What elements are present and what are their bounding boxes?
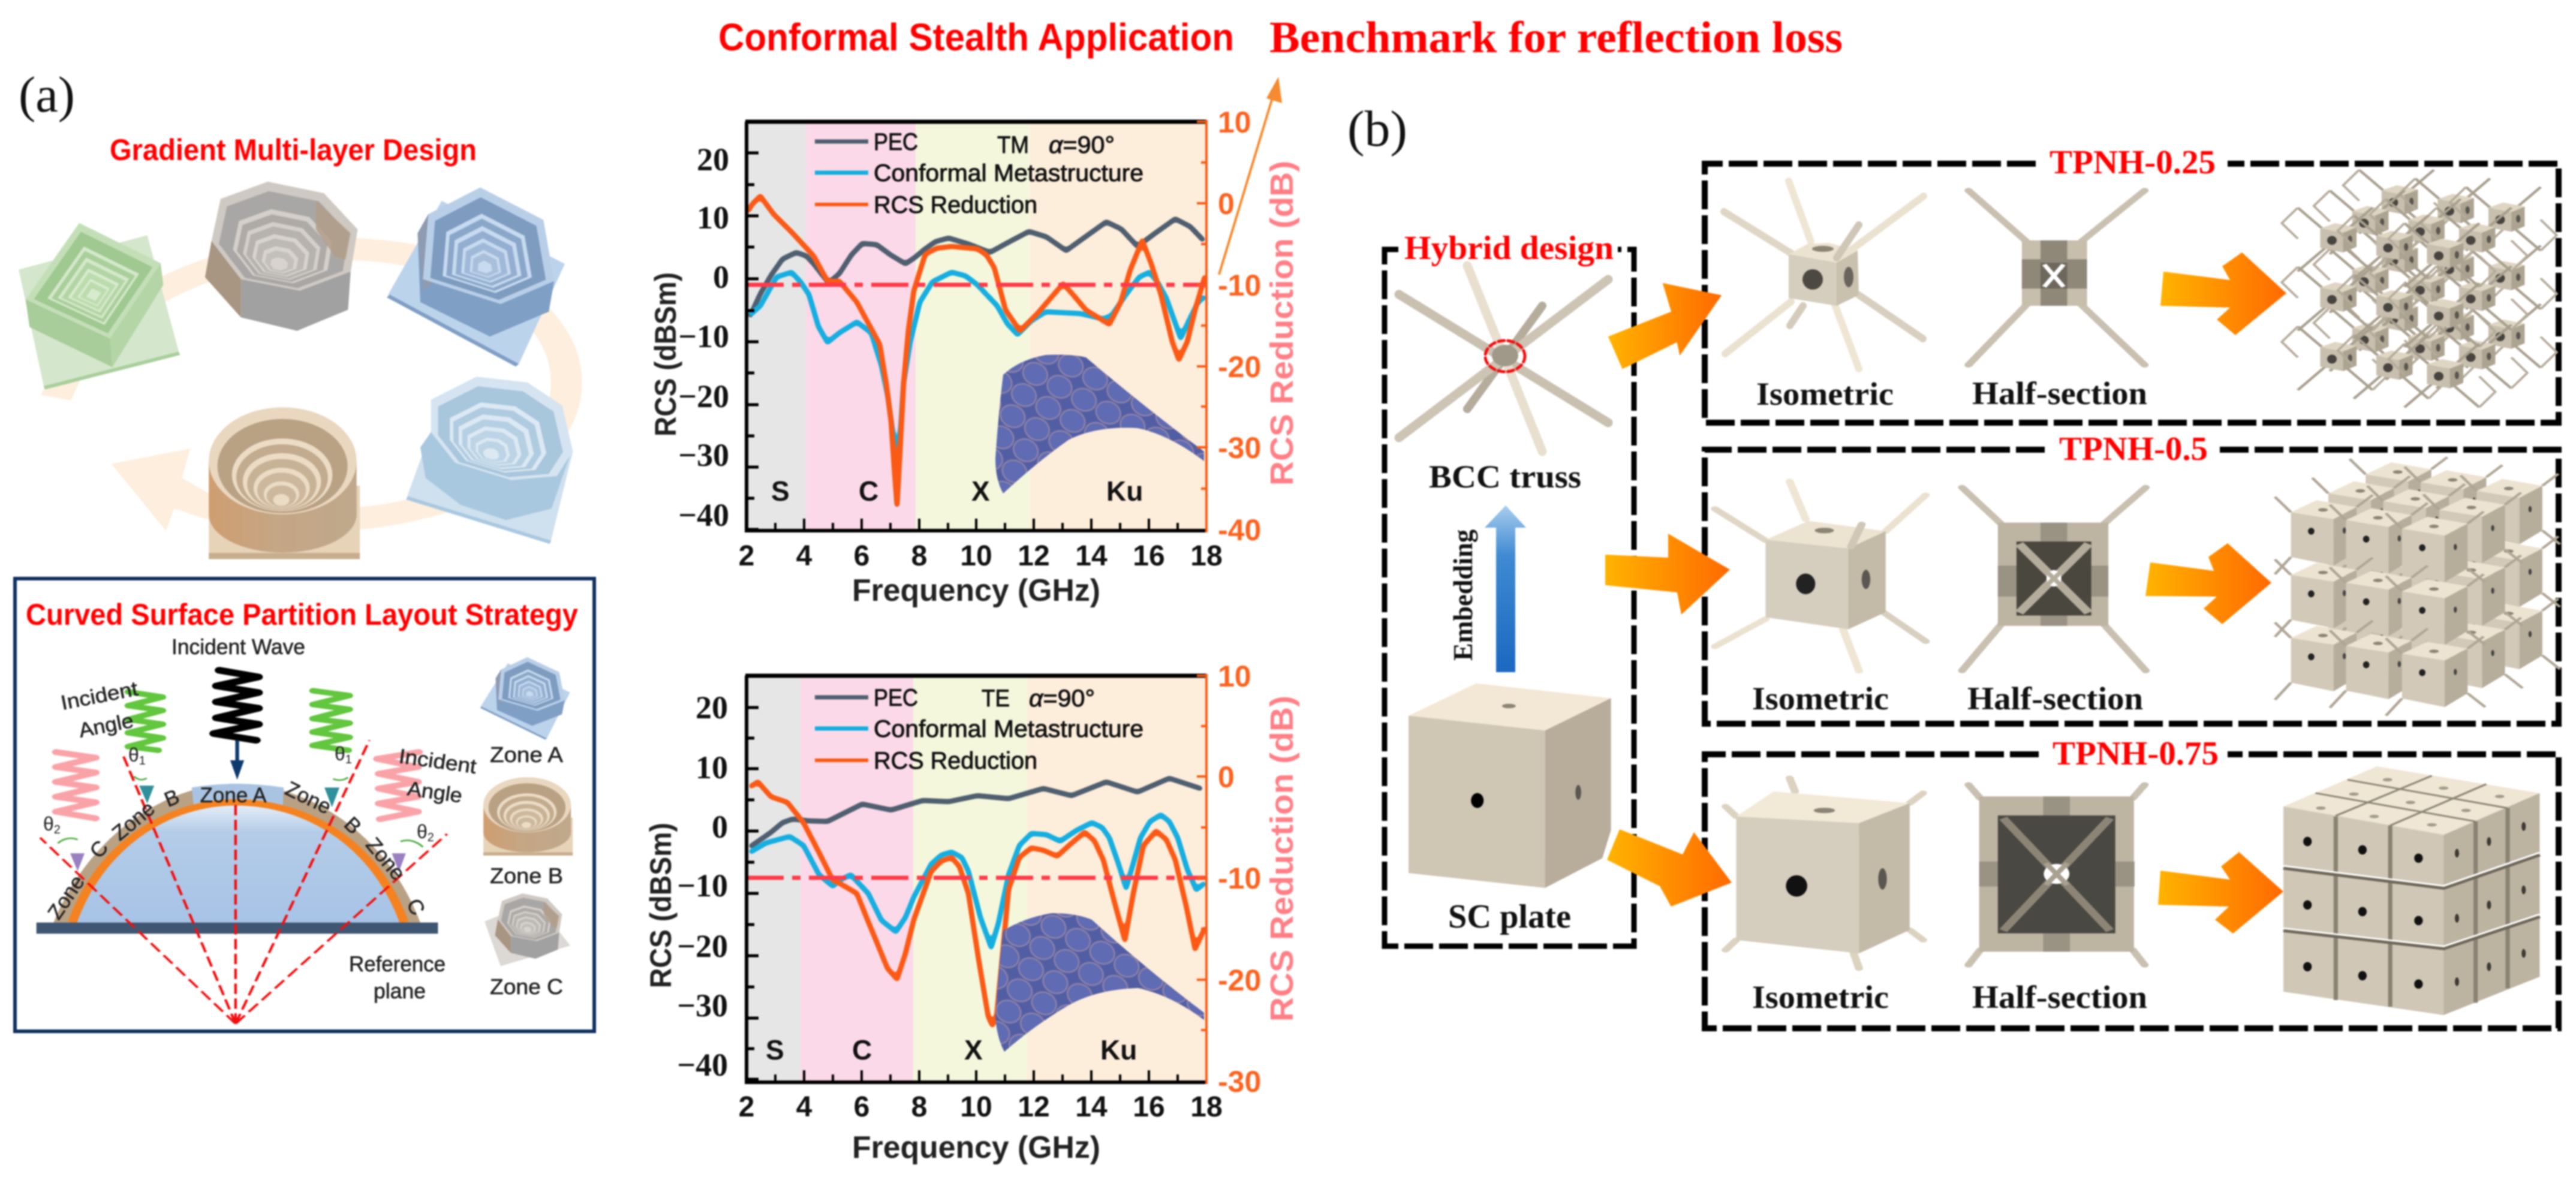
panel: TPNH-0.75 (1705, 735, 2559, 1028)
curve: RCS reduction (747, 196, 1205, 505)
right axis tick labels: -10 (1218, 862, 1261, 895)
legend: PEC (874, 129, 918, 155)
label: Reference plane: plane (374, 979, 426, 1003)
labels: theta angles: θ (335, 743, 345, 764)
dome orange surface (73, 802, 404, 923)
zone labels along dome: Zone (43, 871, 89, 924)
label: Incident Wave: Incident Wave (171, 634, 305, 659)
axes (745, 120, 1206, 532)
frequency bands (747, 122, 1206, 531)
diagram: gradient multi-layer design cycle (19, 182, 573, 559)
x axis tick labels: 16 (1133, 1091, 1165, 1123)
wave: green left (128, 692, 162, 803)
icon: TPNH-0.5 lattice (2275, 457, 2560, 716)
legend: α=90° (1029, 685, 1095, 712)
label: Isometric: Isometric (1752, 979, 1889, 1015)
label: Isometric: Isometric (1752, 681, 1889, 717)
curve: conformal metastructure (750, 815, 1205, 947)
heading: Curved Surface Partition Layout Strategy: Curved Surface Partition Layout Strategy (26, 598, 578, 631)
curve: PEC (750, 778, 1202, 847)
x axis tick labels: 8 (911, 540, 927, 572)
x axis tick labels (739, 540, 1223, 572)
inset: conformal metastructure (995, 355, 1204, 493)
left axis tick labels (678, 142, 729, 533)
labels: theta angles: 2 (428, 831, 434, 844)
left axis tick labels: −40 (677, 1047, 728, 1083)
legend: PEC (874, 685, 918, 711)
legend: RCS Reduction (874, 748, 1037, 774)
x axis tick labels (739, 1091, 1223, 1123)
icon: half-section unit (1962, 487, 2145, 670)
label: Incident Angle left: Angle (77, 709, 136, 742)
left axis tick labels: 0 (712, 809, 728, 845)
left axis tick labels: −30 (677, 988, 728, 1024)
x axis tick labels: 16 (1133, 540, 1165, 572)
icon: Zone A hexagon (481, 657, 570, 739)
threshold line (747, 283, 1206, 287)
right axis tick labels: 10 (1218, 106, 1251, 139)
labels: theta angles: θ (128, 744, 139, 766)
dome body (73, 802, 404, 923)
x axis tick labels: 18 (1190, 540, 1223, 572)
band labels (771, 475, 1143, 507)
right axis tick labels: 0 (1218, 760, 1235, 794)
legend (815, 129, 1143, 218)
icon: gray octagon cell (205, 182, 357, 331)
diagram: curved dome with zones (37, 670, 447, 1024)
zone labels along dome: C (402, 895, 429, 919)
x axis tick labels: 6 (854, 1091, 869, 1123)
x axis tick labels: 2 (739, 540, 754, 572)
axis title: Frequency (GHz): Frequency (GHz) (852, 1130, 1100, 1165)
label: Half-section: Half-section (1972, 979, 2147, 1015)
label: Half-section: Half-section (1972, 375, 2147, 411)
legend: TE (982, 685, 1010, 712)
band labels (766, 1034, 1137, 1065)
arrow: hybrid to TPNH-0.5 (1605, 534, 1730, 615)
left axis tick labels: 10 (696, 749, 728, 785)
left axis tick labels (677, 690, 728, 1083)
icon: half-section unit (1969, 785, 2145, 965)
icon: Zone B circle (483, 777, 573, 856)
zone labels along dome: Zone (108, 797, 160, 845)
icon: BCC truss (1399, 266, 1608, 451)
dome outer zone band (53, 784, 420, 923)
zone A band (192, 784, 284, 808)
label: Incident Angle left (59, 678, 140, 742)
arrow: to lattice (2160, 252, 2286, 335)
panel: TPNH-0.5 (1705, 431, 2560, 724)
heading: Conformal Stealth Application: Conformal Stealth Application (718, 16, 1234, 59)
labels: theta angles (43, 743, 434, 844)
right axis tick labels: -40 (1218, 513, 1261, 547)
arrow: SC plate to TPNH-0.75 (1607, 829, 1732, 907)
band labels: C (859, 475, 878, 507)
x axis tick labels: 18 (1190, 1091, 1223, 1123)
left axis tick labels: −20 (677, 928, 728, 964)
heading: Hybrid design: Hybrid design (1404, 230, 1614, 267)
label: Reference plane: Reference (349, 952, 446, 976)
icon: green square cell (19, 223, 179, 389)
arrow: orange axis extension (1219, 77, 1282, 275)
arrow: to lattice (2145, 543, 2271, 624)
x axis tick labels: 4 (796, 540, 812, 572)
threshold line (747, 875, 1206, 880)
wave: black normal incidence (214, 670, 258, 779)
legend: zone icons (481, 657, 573, 999)
axes (745, 674, 1206, 1084)
wave: pink left (56, 752, 95, 871)
x axis tick labels: 12 (1018, 540, 1050, 572)
label: Embedding: Embedding (1448, 529, 1478, 661)
arrow: embedding (1485, 505, 1526, 672)
inset: conformal metastructure (995, 913, 1204, 1052)
label: Half-section: Half-section (1967, 681, 2143, 717)
right axis tick labels: 0 (1218, 187, 1235, 221)
legend: RCS Reduction (874, 192, 1037, 218)
legend: α=90° (1049, 132, 1115, 158)
zone labels along dome: C (85, 836, 113, 863)
x axis tick labels: 12 (1018, 1091, 1050, 1123)
zone labels along dome: Zone (282, 777, 335, 819)
icon: light blue decagon cell (407, 377, 573, 543)
left axis tick labels: −30 (678, 437, 729, 473)
icon: isometric unit (1726, 778, 1923, 968)
right axis tick labels (1218, 106, 1261, 547)
label: Incident Angle right: Incident (398, 745, 478, 778)
axis title: RCS Reduction (dB): RCS Reduction (dB) (1264, 161, 1300, 486)
highlight circle (1485, 341, 1525, 372)
x axis tick labels: 14 (1075, 1091, 1108, 1123)
heading: Gradient Multi-layer Design: Gradient Multi-layer Design (110, 133, 477, 167)
labels: theta angles: 2 (54, 823, 61, 836)
band labels: Ku (1100, 1034, 1137, 1065)
label: Incident Angle right: Angle (406, 777, 464, 808)
panel: curved surface partition layout strategy (15, 579, 594, 1031)
labels: theta angles: θ (417, 821, 428, 842)
icon: half-section unit (1969, 191, 2145, 365)
icon: TPNH-0.25 lattice (2282, 170, 2557, 407)
right axis tick labels: -30 (1218, 431, 1261, 465)
partition dashed lines (40, 740, 447, 1024)
x axis tick labels: 4 (796, 1091, 812, 1123)
zone labels along dome: Zone A (200, 784, 267, 807)
left axis tick labels: 0 (713, 259, 729, 295)
label: Incident Angle right (398, 745, 478, 808)
label: panel a: (a) (19, 67, 75, 123)
label: Zone A: Zone A (490, 742, 563, 767)
icon: tan circular cell (209, 407, 360, 559)
icon: isometric unit (1715, 481, 1926, 671)
chart: TM RCS vs frequency (649, 106, 1300, 608)
left axis tick labels: 20 (696, 690, 728, 726)
x axis tick labels: 14 (1075, 540, 1108, 572)
heading: TPNH-0.75: TPNH-0.75 (2053, 735, 2219, 772)
x axis tick labels: 2 (739, 1091, 754, 1123)
left axis tick labels: −20 (678, 378, 729, 414)
label: Zone B: Zone B (490, 863, 563, 888)
incidence angle arcs (58, 776, 423, 847)
labels: theta angles: 1 (345, 753, 352, 766)
x axis tick labels: 10 (960, 540, 992, 572)
left axis tick labels: −10 (677, 868, 728, 904)
panel: TPNH-0.25 (1705, 144, 2559, 423)
zone labels along dome: Zone (361, 833, 410, 885)
right axis tick labels: 10 (1218, 660, 1251, 693)
curve: PEC (750, 219, 1204, 317)
right axis tick labels: -20 (1218, 964, 1261, 997)
right axis tick labels: -10 (1218, 269, 1261, 302)
heading: TPNH-0.5: TPNH-0.5 (2059, 431, 2208, 468)
right axis tick labels (1218, 660, 1261, 1098)
x axis tick labels: 6 (854, 540, 869, 572)
band labels: X (964, 1034, 983, 1065)
icon: isometric unit (1724, 181, 1924, 369)
wave: pink right (377, 752, 419, 872)
labels: theta angles: 1 (139, 754, 146, 767)
right axis tick labels: -30 (1218, 1065, 1261, 1098)
labels: theta angles: θ (43, 813, 54, 835)
x axis tick labels: 10 (960, 1091, 992, 1123)
arrow: pale cycle arc (56, 249, 567, 531)
left axis tick labels: 20 (697, 142, 729, 177)
heading: TPNH-0.25: TPNH-0.25 (2050, 144, 2216, 181)
curve: conformal metastructure (750, 272, 1205, 505)
left axis tick labels: 10 (697, 200, 729, 236)
axis title: Frequency (GHz): Frequency (GHz) (852, 573, 1100, 608)
label: panel b: (b) (1347, 101, 1407, 157)
band labels: S (766, 1034, 784, 1065)
reference plane (37, 923, 438, 934)
icon: SC plate cube (1409, 684, 1611, 888)
icon: TPNH-0.75 lattice (2283, 766, 2539, 1015)
wave: green right (313, 691, 349, 807)
axis title: RCS (dBSm): RCS (dBSm) (649, 272, 682, 437)
label: BCC truss: BCC truss (1429, 459, 1581, 495)
arrow: BCC truss to TPNH-0.25 (1608, 283, 1722, 369)
left axis tick labels: −10 (678, 318, 729, 354)
band labels: X (971, 475, 990, 507)
legend (815, 685, 1143, 774)
label: Incident Angle left: Incident (59, 678, 140, 715)
panel: hybrid design (1385, 230, 1634, 946)
left axis tick labels: −40 (678, 497, 729, 533)
band labels: C (852, 1034, 872, 1065)
legend: Conformal Metastructure (874, 160, 1143, 186)
icon: Zone C octagon (484, 893, 570, 966)
band labels: Ku (1106, 475, 1143, 507)
axis title: RCS (dBSm): RCS (dBSm) (644, 823, 678, 988)
right axis tick labels: -20 (1218, 350, 1261, 384)
heading: Benchmark for reflection loss: Benchmark for reflection loss (1269, 13, 1843, 62)
frequency bands (747, 676, 1206, 1082)
zone labels along dome (43, 777, 429, 924)
label: Reference plane (349, 952, 446, 1003)
label: Isometric: Isometric (1756, 376, 1894, 412)
chart: TE RCS vs frequency (644, 660, 1300, 1165)
curve: RCS reduction (750, 782, 1205, 1025)
x axis tick labels: 8 (911, 1091, 927, 1123)
label: Zone C: Zone C (490, 974, 563, 999)
legend: Conformal Metastructure (874, 716, 1143, 742)
zone labels along dome: B (339, 812, 366, 839)
label: SC plate: SC plate (1448, 898, 1571, 935)
legend: TM (997, 132, 1029, 158)
zone labels along dome: B (161, 785, 183, 812)
arrow: to lattice (2158, 852, 2283, 934)
band labels: S (771, 475, 790, 507)
icon: blue hexagon cell (388, 188, 565, 365)
axis title: RCS Reduction (dB): RCS Reduction (dB) (1264, 696, 1300, 1022)
